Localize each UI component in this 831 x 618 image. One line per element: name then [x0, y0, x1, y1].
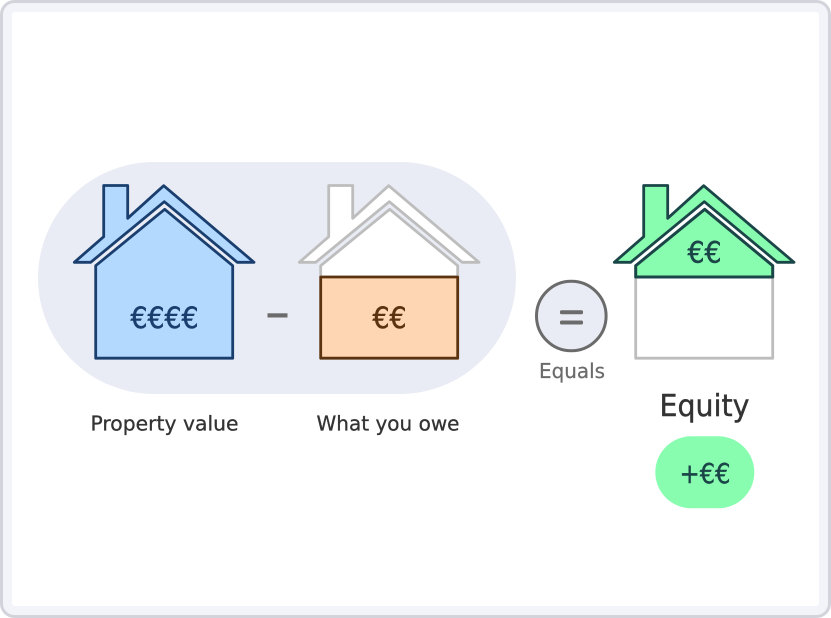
equals label: Equals [539, 359, 605, 383]
minus sign [268, 313, 288, 318]
house: equity: €€ [688, 236, 722, 270]
label: equity: Equity [660, 389, 750, 424]
panel: property value minus what you owe [38, 162, 516, 394]
badge: plus euros: +€€ [680, 457, 730, 490]
badge: plus euros [655, 436, 754, 508]
house: what you owe [299, 186, 479, 358]
house: property value [74, 186, 254, 358]
equals icon [536, 281, 606, 351]
house: what you owe: €€ [372, 301, 406, 335]
label: property value: Property value [90, 412, 238, 436]
label: what you owe: What you owe [316, 412, 460, 436]
house: equity [614, 186, 794, 358]
house: property value: €€€€ [130, 301, 198, 335]
